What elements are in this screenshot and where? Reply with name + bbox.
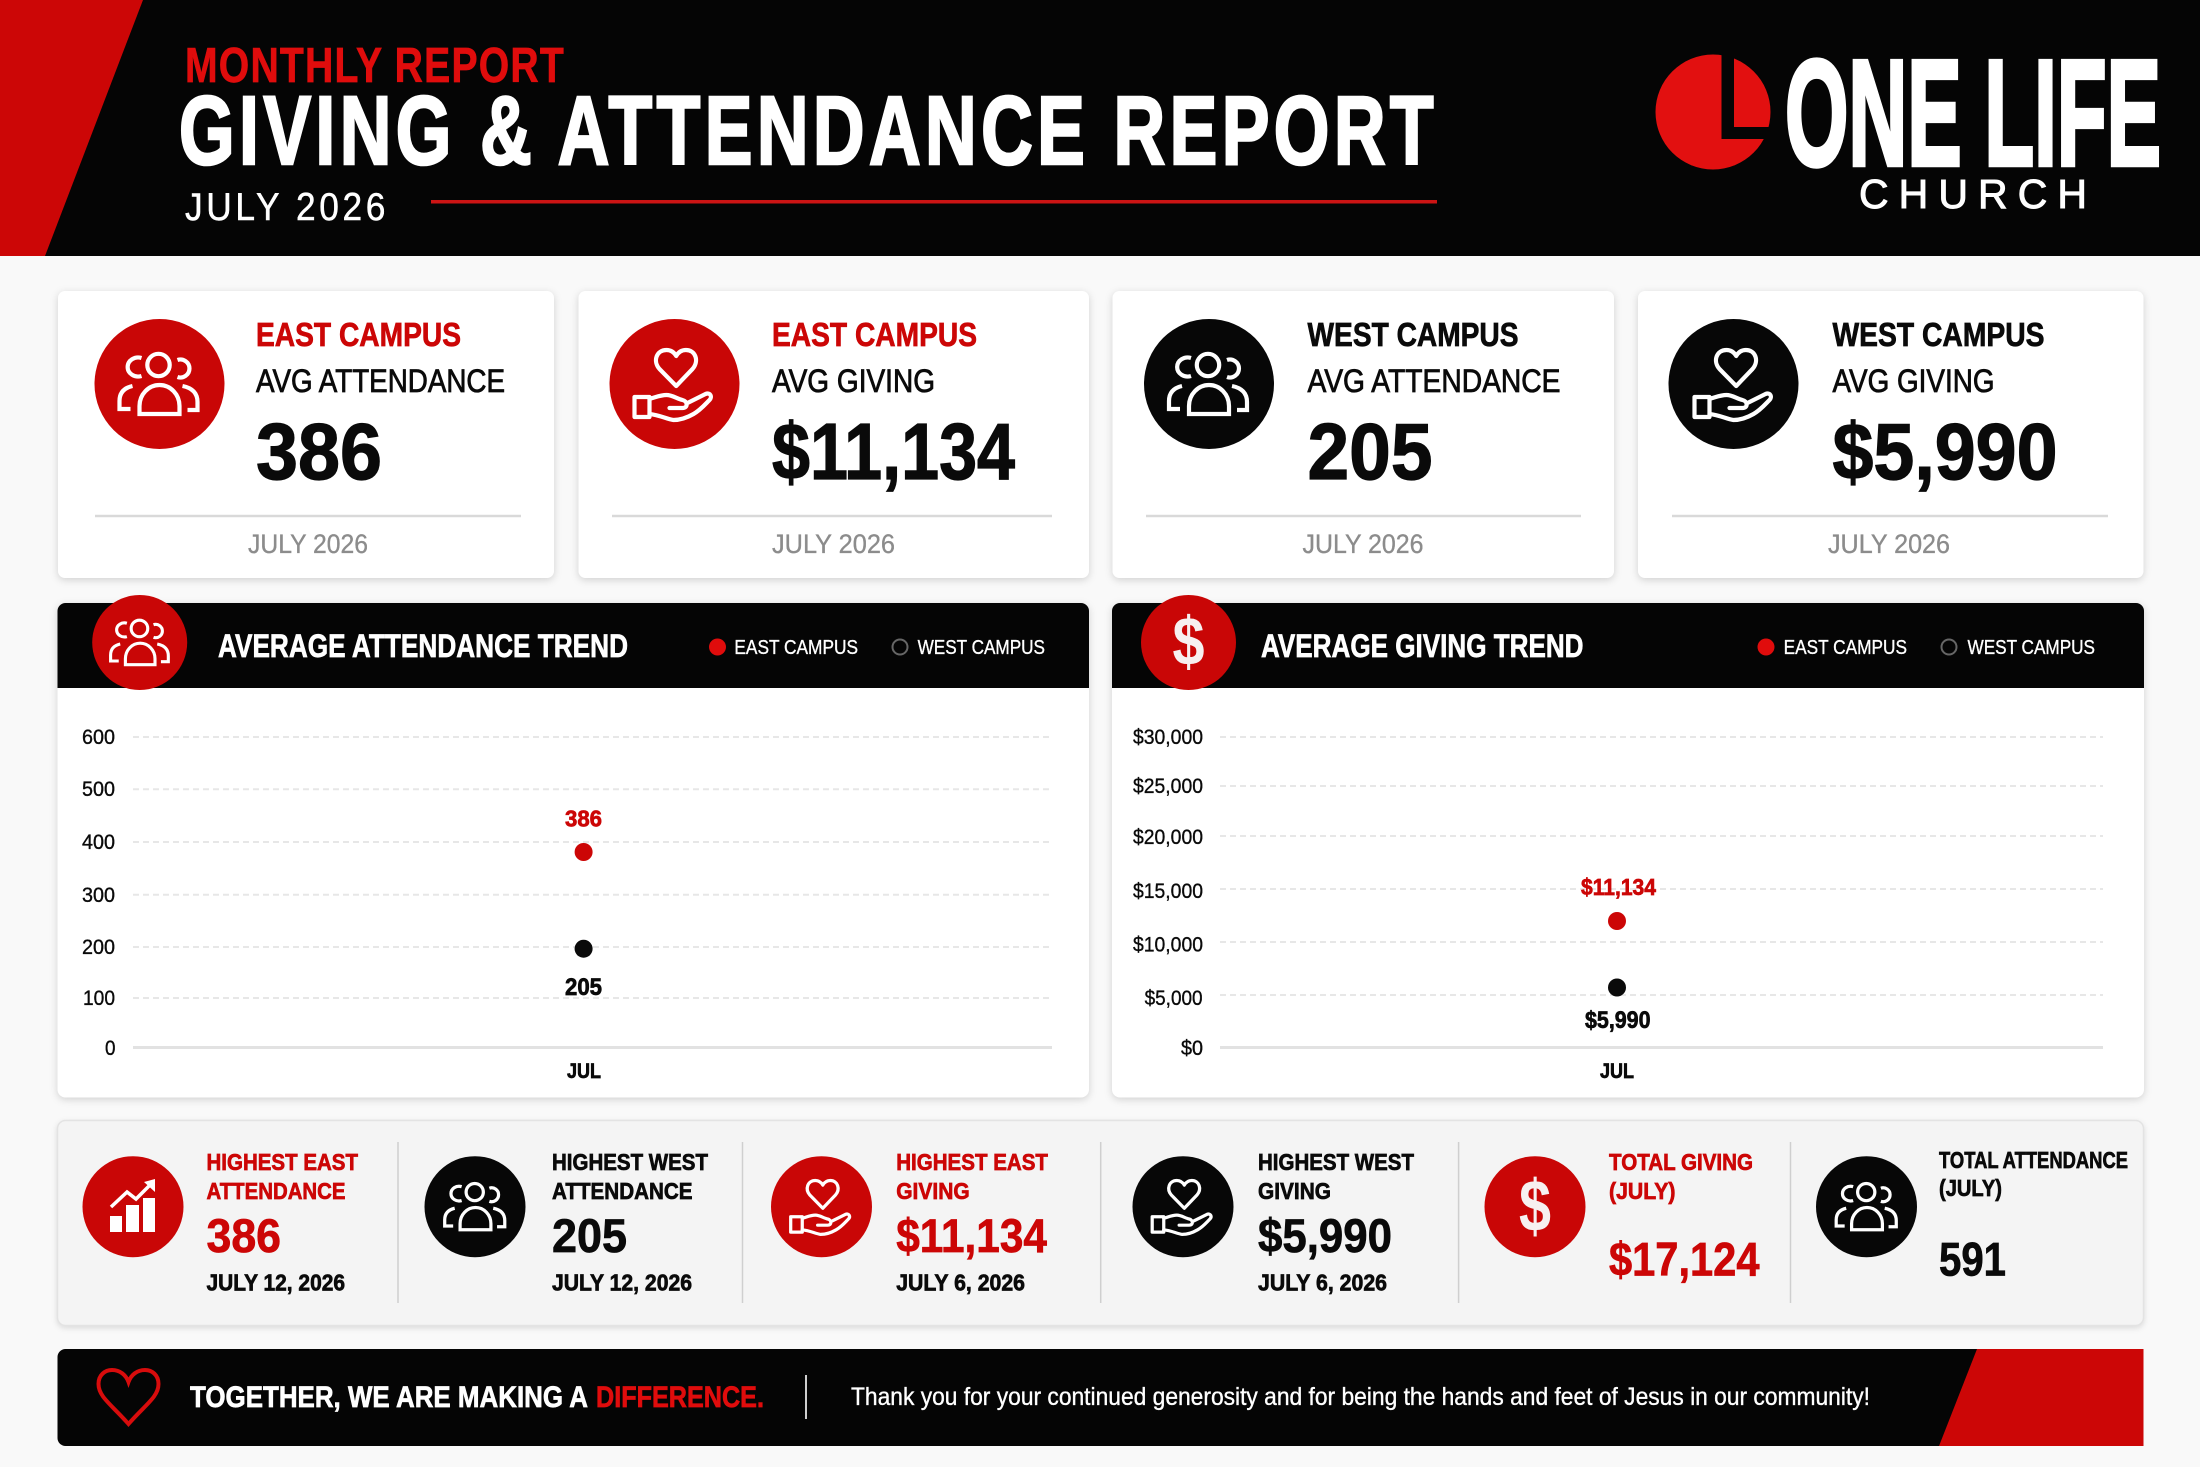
campus label: EAST CAMPUS	[256, 316, 461, 353]
eyebrow: monthly report: MONTHLY REPORT	[185, 39, 565, 93]
campus label: WEST CAMPUS	[1308, 316, 1518, 353]
scatter chart: giving: $25,000	[1133, 775, 1203, 798]
stat: total attendance	[1816, 1147, 2128, 1286]
scatter chart: attendance: 0	[105, 1037, 116, 1060]
value: $5,990	[1832, 407, 2058, 496]
scatter chart: giving	[1133, 726, 2103, 1083]
campus label: EAST CAMPUS	[772, 316, 977, 353]
stat: highest east giving	[771, 1149, 1048, 1296]
date: JULY 2026	[185, 186, 389, 229]
scatter chart: attendance: JUL	[567, 1060, 601, 1083]
icon: heart in hand	[771, 1156, 872, 1257]
icon: heart in hand	[1132, 1156, 1234, 1257]
stat: total giving: (JULY)	[1609, 1178, 1676, 1204]
icon: heart outline	[98, 1370, 158, 1424]
icon: heart in hand	[1668, 319, 1798, 449]
stat: highest west attendance	[424, 1149, 708, 1296]
icon: people	[424, 1156, 526, 1257]
scatter chart: giving: $15,000	[1133, 880, 1203, 903]
metric label: AVG ATTENDANCE	[1308, 363, 1560, 399]
icon: rising bar chart	[82, 1156, 184, 1257]
icon: people	[92, 595, 187, 690]
stat: highest west attendance: ATTENDANCE	[552, 1178, 692, 1204]
scatter chart: giving: $20,000	[1133, 826, 1203, 849]
scatter chart: giving: $11,134	[1581, 874, 1656, 900]
stat label: HIGHEST WEST	[1258, 1149, 1414, 1175]
legend: WEST CAMPUS	[1968, 636, 2095, 659]
stat label: HIGHEST WEST	[552, 1149, 708, 1175]
panel title: AVERAGE ATTENDANCE TREND	[218, 628, 628, 664]
stat: highest east attendance: ATTENDANCE	[206, 1178, 346, 1204]
panel: average attendance trend	[58, 595, 1089, 1098]
stat: highest west giving: GIVING	[1258, 1178, 1331, 1204]
metric label: AVG GIVING	[772, 363, 935, 399]
stat label: TOTAL ATTENDANCE	[1939, 1147, 2128, 1173]
legend	[709, 636, 1045, 659]
value: $11,134	[772, 407, 1015, 496]
stat: total giving	[1484, 1149, 1760, 1286]
stat value: $5,990	[1258, 1209, 1392, 1262]
scatter chart: giving: $30,000	[1133, 726, 1203, 749]
metric label: AVG GIVING	[1832, 363, 1994, 399]
legend: EAST CAMPUS	[1784, 636, 1907, 659]
panel title: AVERAGE GIVING TREND	[1261, 628, 1584, 664]
icon: people	[1816, 1156, 1917, 1257]
icon: dollar	[1484, 1156, 1586, 1257]
scatter chart: attendance: 300	[82, 884, 115, 907]
period: JULY 2026	[1828, 529, 1950, 559]
stat value: 205	[552, 1209, 627, 1262]
footer banner	[58, 1349, 2144, 1446]
scatter chart: attendance: 400	[82, 831, 115, 854]
stat label: TOTAL GIVING	[1609, 1149, 1753, 1175]
logo	[1656, 28, 2161, 217]
value: 386	[256, 407, 382, 496]
period: JULY 2026	[248, 529, 368, 559]
KPI card: east giving	[578, 291, 1089, 578]
stat: total attendance: (JULY)	[1939, 1175, 2002, 1201]
scatter chart: giving: $0	[1181, 1037, 1203, 1060]
summary strip	[58, 1120, 2144, 1326]
tagline: DIFFERENCE.	[596, 1381, 764, 1414]
scatter chart: attendance	[82, 726, 1052, 1083]
campus label: WEST CAMPUS	[1832, 316, 2044, 353]
stat date: JULY 6, 2026	[896, 1270, 1025, 1296]
panel header bar	[58, 603, 1089, 688]
header banner	[0, 0, 2200, 256]
icon: people	[1144, 319, 1274, 449]
stat label: HIGHEST EAST	[896, 1149, 1048, 1175]
icon: dollar	[1141, 595, 1236, 690]
scatter chart: giving: $5,000	[1145, 987, 1203, 1010]
scatter chart: giving: $10,000	[1133, 934, 1203, 957]
legend: EAST CAMPUS	[734, 636, 858, 659]
KPI card: east attendance	[58, 291, 554, 578]
value: 205	[1308, 407, 1432, 496]
red slanted accent	[1939, 1349, 2144, 1446]
logo subline: CHURCH	[1859, 171, 2087, 217]
panel: average giving trend	[1112, 595, 2144, 1098]
KPI card: west giving	[1638, 291, 2144, 578]
scatter chart: attendance: 200	[82, 936, 115, 959]
KPI card: west attendance	[1112, 291, 1614, 578]
stat: highest east giving: GIVING	[896, 1178, 970, 1204]
legend	[1758, 636, 2095, 659]
stat value: $17,124	[1609, 1232, 1760, 1286]
title: GIVING & ATTENDANCE REPORT	[179, 76, 1438, 185]
scatter chart: attendance: 386	[565, 806, 602, 832]
stat date: JULY 12, 2026	[552, 1270, 692, 1296]
scatter chart: attendance: 205	[565, 974, 602, 1001]
stat value: $11,134	[896, 1209, 1047, 1262]
scatter chart: attendance: 500	[82, 778, 115, 801]
legend: WEST CAMPUS	[918, 636, 1045, 659]
stat date: JULY 6, 2026	[1258, 1270, 1387, 1296]
icon: dollar: $	[1519, 1166, 1551, 1247]
stat label: HIGHEST EAST	[206, 1149, 358, 1175]
scatter chart: giving: JUL	[1600, 1060, 1634, 1083]
scatter chart: giving: $5,990	[1585, 1007, 1650, 1034]
period: JULY 2026	[1302, 529, 1424, 559]
scatter chart: attendance: 100	[83, 987, 115, 1010]
panel header bar	[1112, 603, 2144, 688]
stat value: 591	[1939, 1232, 2006, 1286]
stat: highest west giving	[1132, 1149, 1414, 1296]
stat: highest east attendance	[82, 1149, 358, 1296]
tagline: TOGETHER, WE ARE MAKING A	[190, 1381, 588, 1414]
icon: people	[94, 319, 224, 449]
icon: heart in hand	[610, 319, 740, 449]
red slanted accent	[0, 0, 143, 256]
metric label: AVG ATTENDANCE	[256, 363, 505, 399]
red rule	[431, 200, 1437, 204]
period: JULY 2026	[772, 529, 895, 559]
stat date: JULY 12, 2026	[206, 1270, 345, 1296]
thank-you message: Thank you for your continued generosity and for being the hands and feet of Jesus in our community!	[851, 1383, 1870, 1411]
icon: dollar: $	[1172, 603, 1204, 680]
scatter chart: attendance: 600	[82, 726, 115, 749]
stat value: 386	[206, 1209, 281, 1262]
